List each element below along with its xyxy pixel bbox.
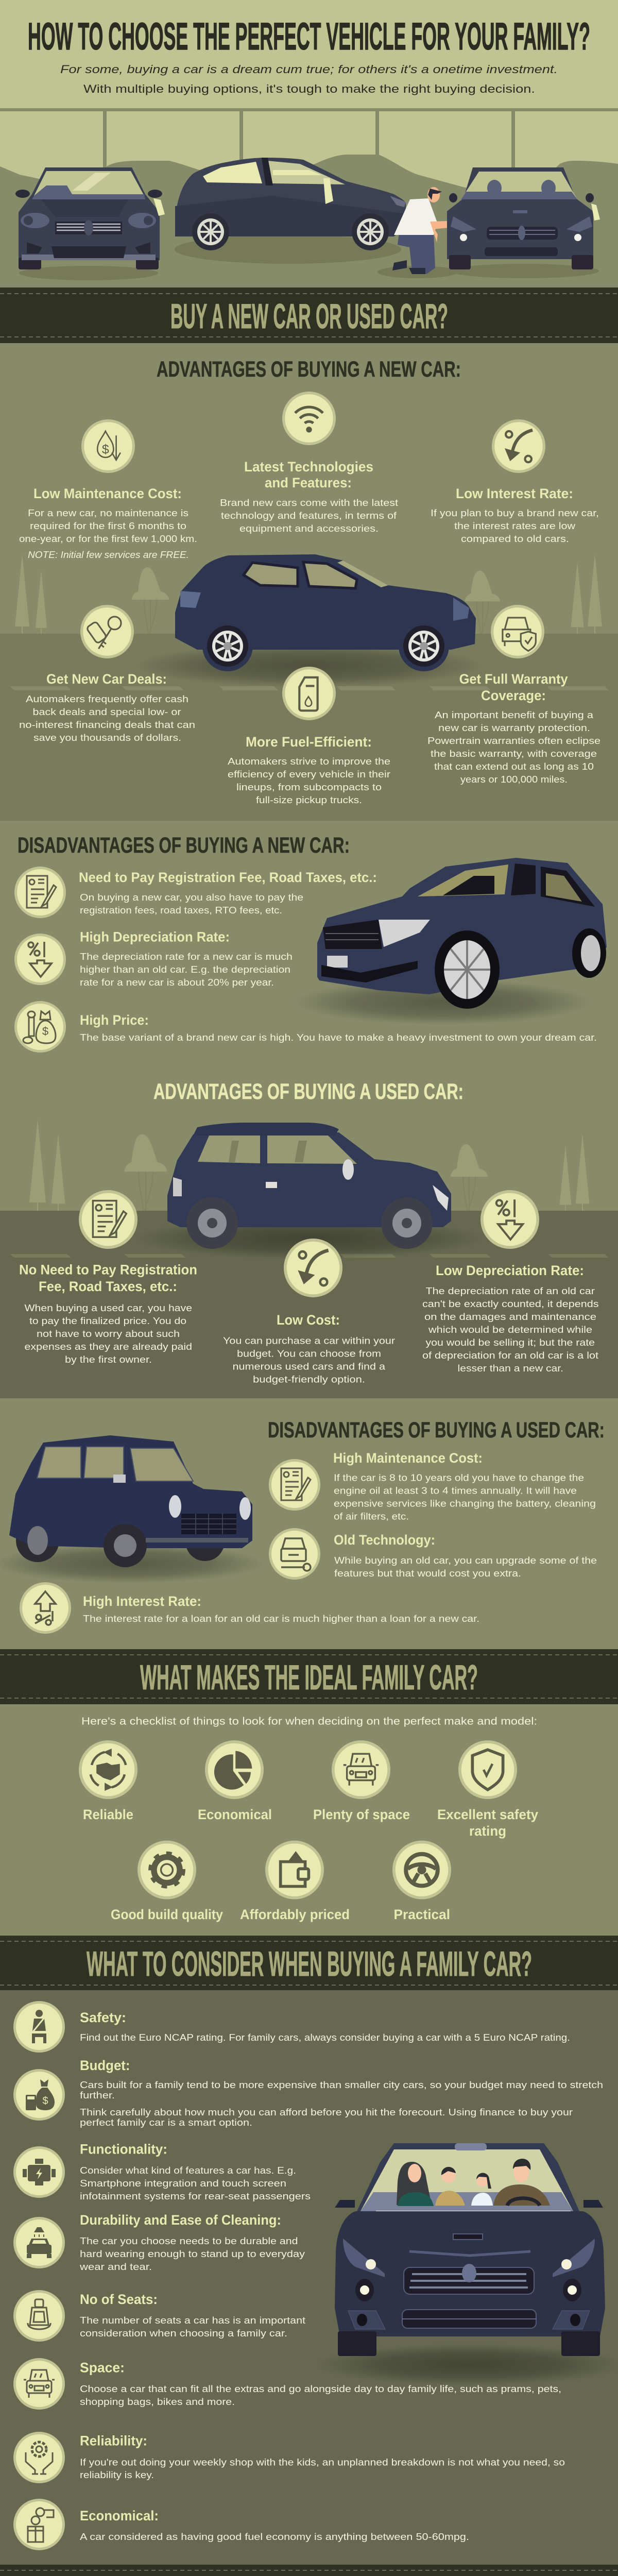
text: get full warranty coverage: new car is warranty protection. — [438, 722, 590, 733]
heading: ADVANTAGES OF BUYING A USED CAR: — [153, 1079, 464, 1104]
text: low cost: You can purchase a car within your — [223, 1335, 395, 1346]
icon: fuel can — [282, 667, 336, 720]
text: durability: The car you choose needs to be durable and — [80, 2235, 298, 2246]
text: high price: The base variant of a brand new car is high. You have to make a heavy investment to own your dream car. — [80, 1032, 597, 1043]
item: reliable — [79, 1740, 138, 1822]
text: registration fee: On buying a new car, you also have to pay the — [80, 892, 303, 903]
text: budget: Think carefully about how much you can afford before you hit the forecourt. Using finance to buy your — [80, 2107, 573, 2117]
text: durability: hard wearing enough to stand up to everyday — [80, 2248, 305, 2259]
text: budget: Budget: — [80, 2058, 130, 2073]
text: low interest rate: If you plan to buy a brand new car, — [431, 507, 599, 518]
text: high maintenance cost: engine oil at least 3 to 4 times annually. It will have — [334, 1485, 577, 1496]
text: no need to pay registration: When buying a used car, you have — [25, 1302, 192, 1313]
text: no of seats — [80, 2292, 305, 2338]
item: practical — [392, 1840, 451, 1922]
text: functionality: infotainment systems for rear-seat passengers — [80, 2191, 311, 2201]
figure: crouching man — [392, 187, 470, 274]
text: high maintenance cost — [333, 1450, 596, 1522]
text: high interest rate: The interest rate for a loan for an old car is much higher than a loan for a new car. — [83, 1613, 479, 1624]
text: reliability — [80, 2433, 565, 2480]
panel: disadvantages of buying a new car — [14, 833, 607, 1053]
icon: engine — [13, 2146, 65, 2198]
text: low depreciation rate: can't be exactly counted, it depends — [422, 1298, 598, 1309]
car: left front view — [15, 167, 165, 269]
text: high interest rate — [83, 1594, 479, 1624]
intro text: Here's a checklist of things to look for when deciding on the perfect make and model: — [81, 1716, 537, 1727]
text: registration fee — [79, 870, 377, 916]
text: get full warranty coverage: Get Full Warranty — [459, 671, 568, 687]
text: get new car deals: Automakers frequently offer cash — [26, 693, 188, 704]
text: get full warranty coverage: An important benefit of buying a — [435, 709, 594, 720]
illustration: blue car three-quarter view — [294, 858, 607, 1025]
text: low interest rate: compared to old cars. — [461, 533, 569, 544]
text: no need to pay registration: by the first owner. — [65, 1354, 152, 1365]
text: low cost: Low Cost: — [277, 1312, 340, 1328]
road dashes — [10, 686, 609, 690]
item: economical: Economical — [198, 1807, 272, 1822]
icon: registration document — [79, 1190, 138, 1249]
text: economical — [80, 2508, 469, 2542]
text: get full warranty coverage — [427, 671, 600, 785]
text: no need to pay registration: No Need to Pay Registration — [19, 1262, 197, 1278]
text: latest technologies: Brand new cars come with the latest — [220, 497, 398, 508]
text: functionality: Functionality: — [80, 2141, 167, 2157]
panel: advantages of buying a used car — [10, 1079, 609, 1385]
icon: low interest rate — [492, 419, 545, 473]
text: high depreciation rate: rate for a new car is about 20% per year. — [80, 977, 274, 988]
text: registration fee: Need to Pay Registration Fee, Road Taxes, etc.: — [79, 870, 377, 885]
text: space: Choose a car that can fit all the extras and go alongside day to day family life, such as prams, pets, — [80, 2383, 561, 2394]
text: high interest rate: High Interest Rate: — [83, 1594, 201, 1609]
text: low interest rate: Low Interest Rate: — [456, 486, 573, 501]
illustration: showroom with three cars and customer — [0, 108, 618, 287]
background trees — [29, 1120, 590, 1211]
text: no need to pay registration: to pay the finalized price. You do — [29, 1315, 186, 1326]
text: more fuel-efficient: lineups, from subcompacts to — [236, 782, 382, 792]
text: more fuel-efficient: full-size pickup trucks. — [256, 794, 362, 805]
text: functionality — [80, 2141, 311, 2201]
item: plenty of space: Plenty of space — [313, 1807, 410, 1822]
text: no need to pay registration: expenses as they are already paid — [25, 1341, 192, 1352]
icon: seatbelt — [13, 2001, 65, 2053]
text: get new car deals — [19, 671, 195, 743]
item: good build quality: Good build quality — [111, 1907, 223, 1922]
text: low cost: budget. You can choose from — [237, 1348, 381, 1359]
text: functionality: Smartphone integration and touch screen — [80, 2178, 286, 2189]
panel: what to consider list — [13, 2001, 618, 2550]
text: low depreciation rate: of depreciation for an old car is a lot — [422, 1350, 598, 1361]
subtitle: For some, buying a car is a dream cum true; for others it's a onetime investment. — [60, 63, 558, 76]
road dashes — [10, 1254, 609, 1258]
text: high maintenance cost: If the car is 8 to 10 years old you have to change the — [334, 1472, 584, 1483]
heading: DISADVANTAGES OF BUYING A NEW CAR: — [18, 833, 350, 858]
text: get new car deals: save you thousands of dollars. — [33, 732, 181, 743]
text: budget: perfect family car is a smart option. — [80, 2117, 252, 2128]
text: low interest rate: the interest rates are low — [454, 520, 576, 531]
text: get full warranty coverage: Coverage: — [481, 688, 546, 703]
panel: advantages of buying a new car — [10, 357, 609, 805]
text: latest technologies — [220, 459, 398, 534]
text: latest technologies: Latest Technologies — [244, 459, 373, 474]
text: low depreciation rate: you would be selling it; but the rate — [425, 1337, 595, 1348]
item: affordably priced: Affordably priced — [240, 1907, 350, 1922]
illustration: family in car front view — [315, 2143, 618, 2385]
text: low interest rate — [431, 486, 599, 544]
icon: registration document — [14, 867, 66, 918]
text: low maintenance cost: NOTE: Initial few services are FREE. — [28, 549, 189, 560]
item: good build quality — [111, 1840, 223, 1922]
text: low cost: numerous used cars and find a — [233, 1361, 386, 1371]
text: latest technologies: technology and features, in terms of — [221, 510, 397, 521]
family passengers — [397, 2159, 550, 2206]
text: high maintenance cost: High Maintenance Cost: — [333, 1450, 483, 1466]
text: durability — [79, 2212, 305, 2272]
text: more fuel-efficient: More Fuel-Efficient: — [246, 734, 372, 750]
icon: reliability — [13, 2432, 65, 2483]
icon: low cost percent — [284, 1239, 342, 1297]
icon: space car — [13, 2358, 65, 2410]
icon: warranty — [491, 605, 544, 658]
text: no need to pay registration: Fee, Road Taxes, etc.: — [39, 1279, 177, 1294]
text: get new car deals: Get New Car Deals: — [46, 671, 167, 687]
subtitle — [60, 63, 558, 95]
text: low maintenance cost: one-year, or for the first few 1,000 km. — [19, 533, 197, 544]
text: economical: Economical: — [80, 2508, 159, 2523]
text: low maintenance cost: Low Maintenance Cost: — [33, 486, 182, 501]
icon: depreciation — [480, 1190, 539, 1249]
section band: buy a new car or used car — [0, 287, 618, 343]
text: high depreciation rate: The depreciation rate for a new car is much — [80, 951, 293, 962]
text: low depreciation rate: lesser than a new car. — [457, 1363, 563, 1374]
item: plenty of space — [313, 1740, 410, 1822]
item: excellent safety rating: rating — [469, 1823, 506, 1839]
heading: ADVANTAGES OF BUYING A NEW CAR: — [157, 357, 461, 382]
text: reliability: reliability is key. — [80, 2469, 154, 2480]
icon: low maintenance cost — [81, 419, 135, 473]
text: old technology: Old Technology: — [334, 1532, 435, 1548]
illustration: navy mini car — [0, 1435, 265, 1583]
text: no of seats: No of Seats: — [80, 2292, 158, 2307]
text: space: Space: — [80, 2360, 125, 2375]
text: get new car deals: back deals and special low- or — [33, 706, 181, 717]
panel: checklist — [79, 1716, 538, 1922]
text: get new car deals: no-interest financing deals that can — [19, 719, 195, 730]
text: old technology — [334, 1532, 597, 1579]
icon: high maintenance document — [269, 1459, 320, 1511]
text: low depreciation rate: The depreciation rate of an old car — [425, 1285, 595, 1296]
text: high price — [80, 1012, 597, 1043]
text: high depreciation rate — [80, 929, 293, 988]
car shadow — [134, 1218, 484, 1259]
text: high price: High Price: — [80, 1012, 149, 1028]
text: get full warranty coverage: years or 100,000 miles. — [460, 774, 568, 785]
illustration: navy hatchback side view — [175, 554, 476, 671]
icon: budget — [13, 2069, 65, 2121]
text: old technology: features but that would cost you extra. — [334, 1568, 521, 1579]
text: more fuel-efficient: Automakers strive to improve the — [228, 756, 390, 767]
text: budget — [80, 2058, 603, 2128]
text: functionality: Consider what kind of features a car has. E.g. — [80, 2165, 296, 2176]
text: no of seats: The number of seats a car has is an important — [80, 2315, 305, 2326]
icon: new car deals keys — [80, 605, 134, 658]
text: no of seats: consideration when choosing a family car. — [80, 2328, 287, 2338]
car shadow — [134, 644, 484, 687]
text: get full warranty coverage: that can extend out as long as 10 — [434, 761, 594, 772]
car: middle side view — [175, 158, 406, 250]
text: space: shopping bags, bikes and more. — [80, 2396, 235, 2407]
item: excellent safety rating: Excellent safety — [437, 1807, 538, 1822]
text: durability: wear and tear. — [79, 2261, 152, 2272]
section band: what makes the ideal family car — [0, 1649, 618, 1704]
text: low depreciation rate: which would be determined while — [428, 1324, 592, 1335]
text: budget: Cars built for a family tend to be more expensive than smaller city cars, so your budget may need to stretch — [80, 2079, 603, 2090]
icon: old technology — [269, 1528, 320, 1580]
text: safety — [80, 2010, 570, 2043]
item: economical — [198, 1740, 272, 1822]
text: reliability: If you're out doing your weekly shop with the kids, an unplanned breakdown is not what you need, so — [80, 2456, 565, 2468]
text: get full warranty coverage: the basic warranty, with coverage — [431, 748, 597, 759]
subtitle: With multiple buying options, it's tough to make the right buying decision. — [83, 82, 535, 95]
text: more fuel-efficient — [228, 734, 390, 805]
text: low cost: budget-friendly option. — [253, 1374, 365, 1385]
section band: what to consider — [0, 1936, 618, 1990]
text: get full warranty coverage: Powertrain warranties often eclipse — [427, 735, 600, 746]
text: low maintenance cost: For a new car, no maintenance is — [28, 507, 188, 518]
item: excellent safety rating — [437, 1740, 538, 1839]
text: low maintenance cost — [19, 486, 197, 560]
text: high maintenance cost: expensive services like changing the battery, cleaning — [334, 1498, 596, 1509]
text: old technology: While buying an old car, you can upgrade some of the — [334, 1555, 597, 1566]
text: no need to pay registration: not have to worry about such — [37, 1328, 180, 1339]
illustration: navy compact car side view — [167, 1123, 451, 1249]
text: no need to pay registration — [19, 1262, 197, 1365]
text: reliability: Reliability: — [80, 2433, 147, 2448]
text: safety: Safety: — [80, 2010, 126, 2025]
panel: disadvantages of buying a used car — [0, 1418, 605, 1634]
background trees — [15, 554, 602, 634]
text: budget: further. — [80, 2090, 115, 2100]
text: latest technologies: equipment and accessories. — [239, 523, 379, 534]
text: low depreciation rate — [422, 1263, 598, 1374]
section band: tips for maintaining your car — [0, 2565, 618, 2576]
icon: money bag — [14, 1001, 66, 1053]
text: safety: Find out the Euro NCAP rating. For family cars, always consider buying a car with a 5 Euro NCAP rating. — [80, 2032, 570, 2043]
text: low depreciation rate: Low Depreciation Rate: — [436, 1263, 584, 1278]
item: reliable: Reliable — [83, 1807, 133, 1822]
text: low cost — [223, 1312, 395, 1385]
text: space — [80, 2360, 561, 2407]
car: right front view — [447, 167, 600, 269]
icon: depreciation — [14, 934, 66, 985]
icon: car wash — [13, 2217, 65, 2268]
text: high maintenance cost: of air filters, etc. — [334, 1511, 409, 1522]
text: low maintenance cost: required for the first 6 months to — [30, 520, 186, 531]
icon: high interest — [20, 1582, 71, 1634]
text: durability: Durability and Ease of Cleaning: — [80, 2212, 281, 2228]
text: more fuel-efficient: efficiency of every vehicle in their — [228, 769, 390, 779]
text: low depreciation rate: on the damages and maintenance — [424, 1311, 596, 1322]
icon: coins — [13, 2499, 65, 2550]
icon: seat — [13, 2290, 65, 2342]
item: practical: Practical — [393, 1907, 450, 1922]
text: high depreciation rate: High Depreciation Rate: — [80, 929, 230, 945]
item: affordably priced — [240, 1840, 350, 1922]
text: economical: A car considered as having good fuel economy is anything between 50-60mpg. — [80, 2531, 469, 2542]
text: latest technologies: and Features: — [265, 475, 352, 490]
icon: wifi technology — [282, 392, 336, 445]
text: high depreciation rate: higher than an old car. E.g. the depreciation — [80, 964, 290, 975]
text: registration fee: registration fees, road taxes, RTO fees, etc. — [80, 905, 282, 916]
